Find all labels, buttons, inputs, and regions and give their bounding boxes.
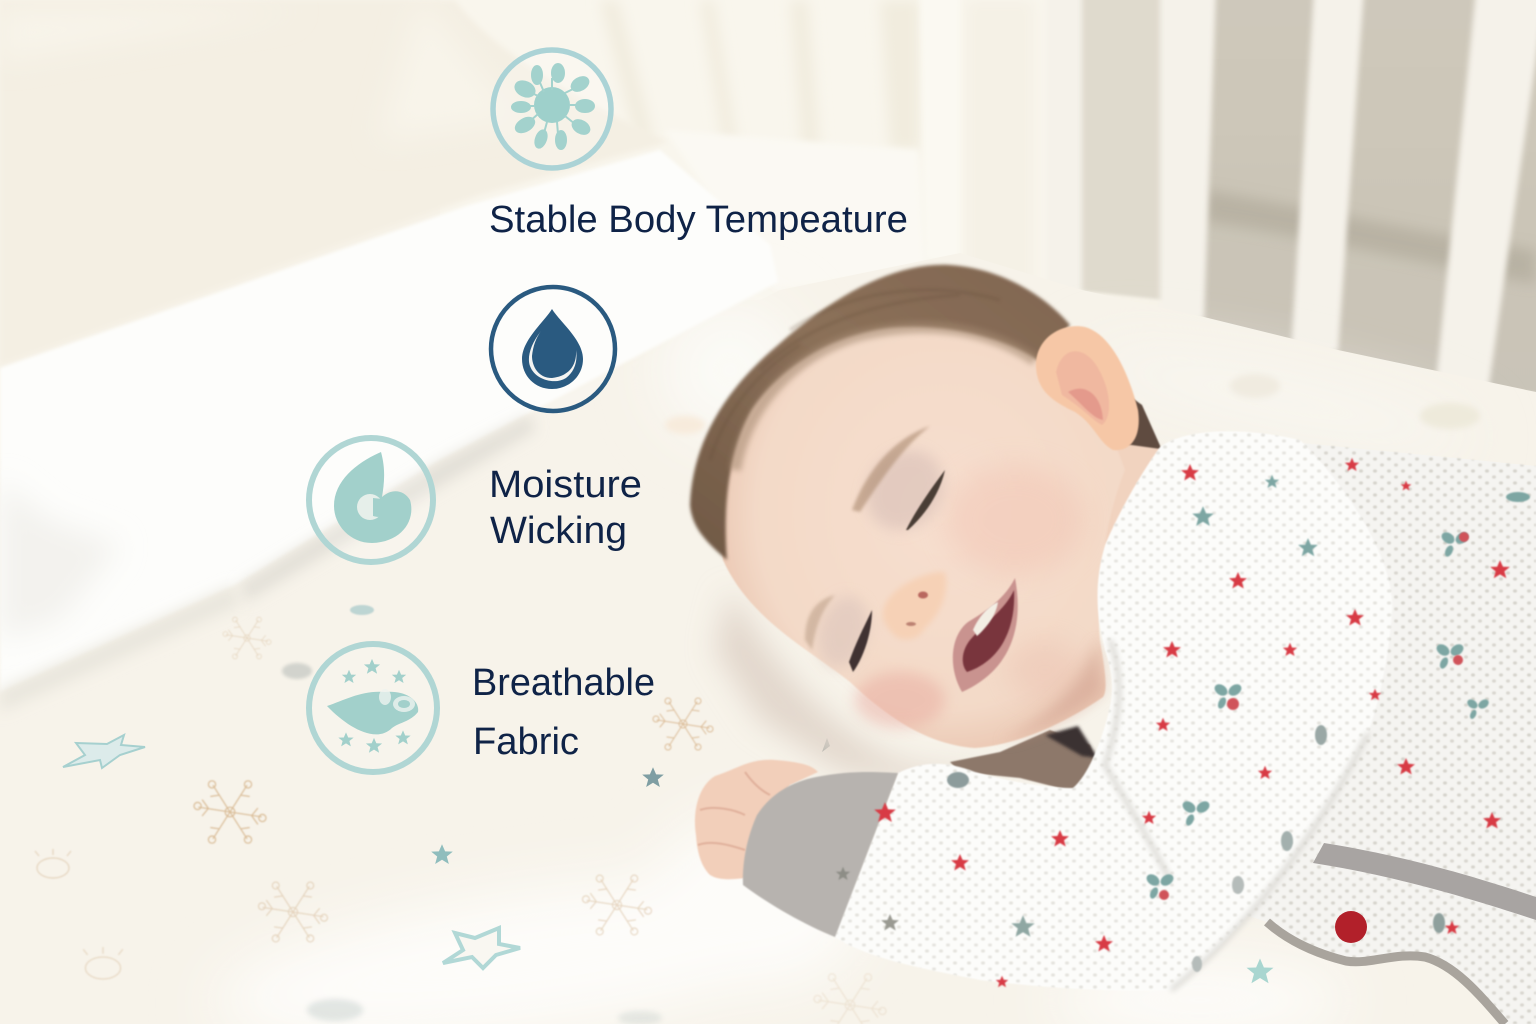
lower closed eye	[849, 610, 872, 672]
heading: moisture wicking: Moisture	[489, 464, 642, 506]
nose	[883, 572, 946, 639]
sleeve and shoulder	[835, 431, 1392, 991]
hand	[695, 760, 818, 879]
bow accents	[1159, 532, 1469, 900]
baby	[690, 265, 1536, 1024]
jaw shadow	[1000, 640, 1103, 742]
icon: fabric and stars badge	[309, 644, 437, 772]
teal stars and bows	[836, 475, 1530, 972]
lower piping	[1267, 922, 1505, 1024]
cream blanket top left	[0, 0, 668, 365]
sleepsuit torso	[1200, 438, 1536, 1024]
pillow	[0, 150, 778, 692]
hair behind ear	[1125, 395, 1162, 465]
sheet print: stars and snowflakes	[35, 374, 1480, 1024]
upper eyebrow	[852, 426, 930, 512]
upper eyelid shadow	[850, 435, 960, 545]
mouth lips	[953, 578, 1018, 692]
crib rail	[665, 130, 925, 290]
snowflakes	[35, 617, 886, 1024]
cheek blush	[945, 465, 1085, 575]
heading: moisture wicking: Wicking	[490, 510, 627, 552]
red stars	[874, 458, 1510, 987]
pillow shadow under head	[715, 590, 1000, 790]
wall panels behind crib	[1075, 0, 1536, 395]
heading: breathable fabric: Breathable	[472, 662, 655, 704]
crib slats	[920, 0, 1536, 392]
mattress sheet	[0, 253, 1536, 1024]
sheet highlights	[203, 300, 1481, 1024]
neck skin	[1075, 440, 1168, 570]
mouth interior	[963, 590, 1014, 672]
heading: breathable fabric	[472, 662, 655, 763]
feature: moisture wicking	[309, 438, 642, 562]
icon: water drop badge	[491, 287, 615, 411]
teeth	[973, 602, 998, 636]
ear	[1036, 326, 1139, 450]
heading: breathable fabric: Fabric	[473, 721, 579, 763]
upper closed eye	[906, 470, 945, 530]
zip band	[1313, 843, 1536, 920]
lower eyelid shadow	[811, 591, 875, 673]
grey cuff	[743, 772, 898, 937]
sleeve fold shading	[1105, 640, 1368, 990]
arm shadow under chin	[950, 730, 1098, 792]
icon: sun / temperature badge	[493, 50, 611, 168]
curtain	[440, 0, 1090, 300]
small teal marks	[282, 605, 1274, 1024]
feature: breathable fabric	[309, 644, 655, 772]
lower eyebrow	[805, 595, 835, 650]
red button	[1335, 911, 1367, 943]
teal star outlines	[63, 735, 520, 968]
head skin	[721, 316, 1125, 748]
wall moulding	[1205, 190, 1536, 284]
hair	[690, 265, 1070, 560]
feature: stable body temperature	[489, 50, 908, 241]
heading: stable body tempeature: Stable Body Tempeature	[489, 199, 908, 241]
heading: moisture wicking	[489, 464, 642, 552]
icon: leaf swirl badge	[309, 438, 433, 562]
